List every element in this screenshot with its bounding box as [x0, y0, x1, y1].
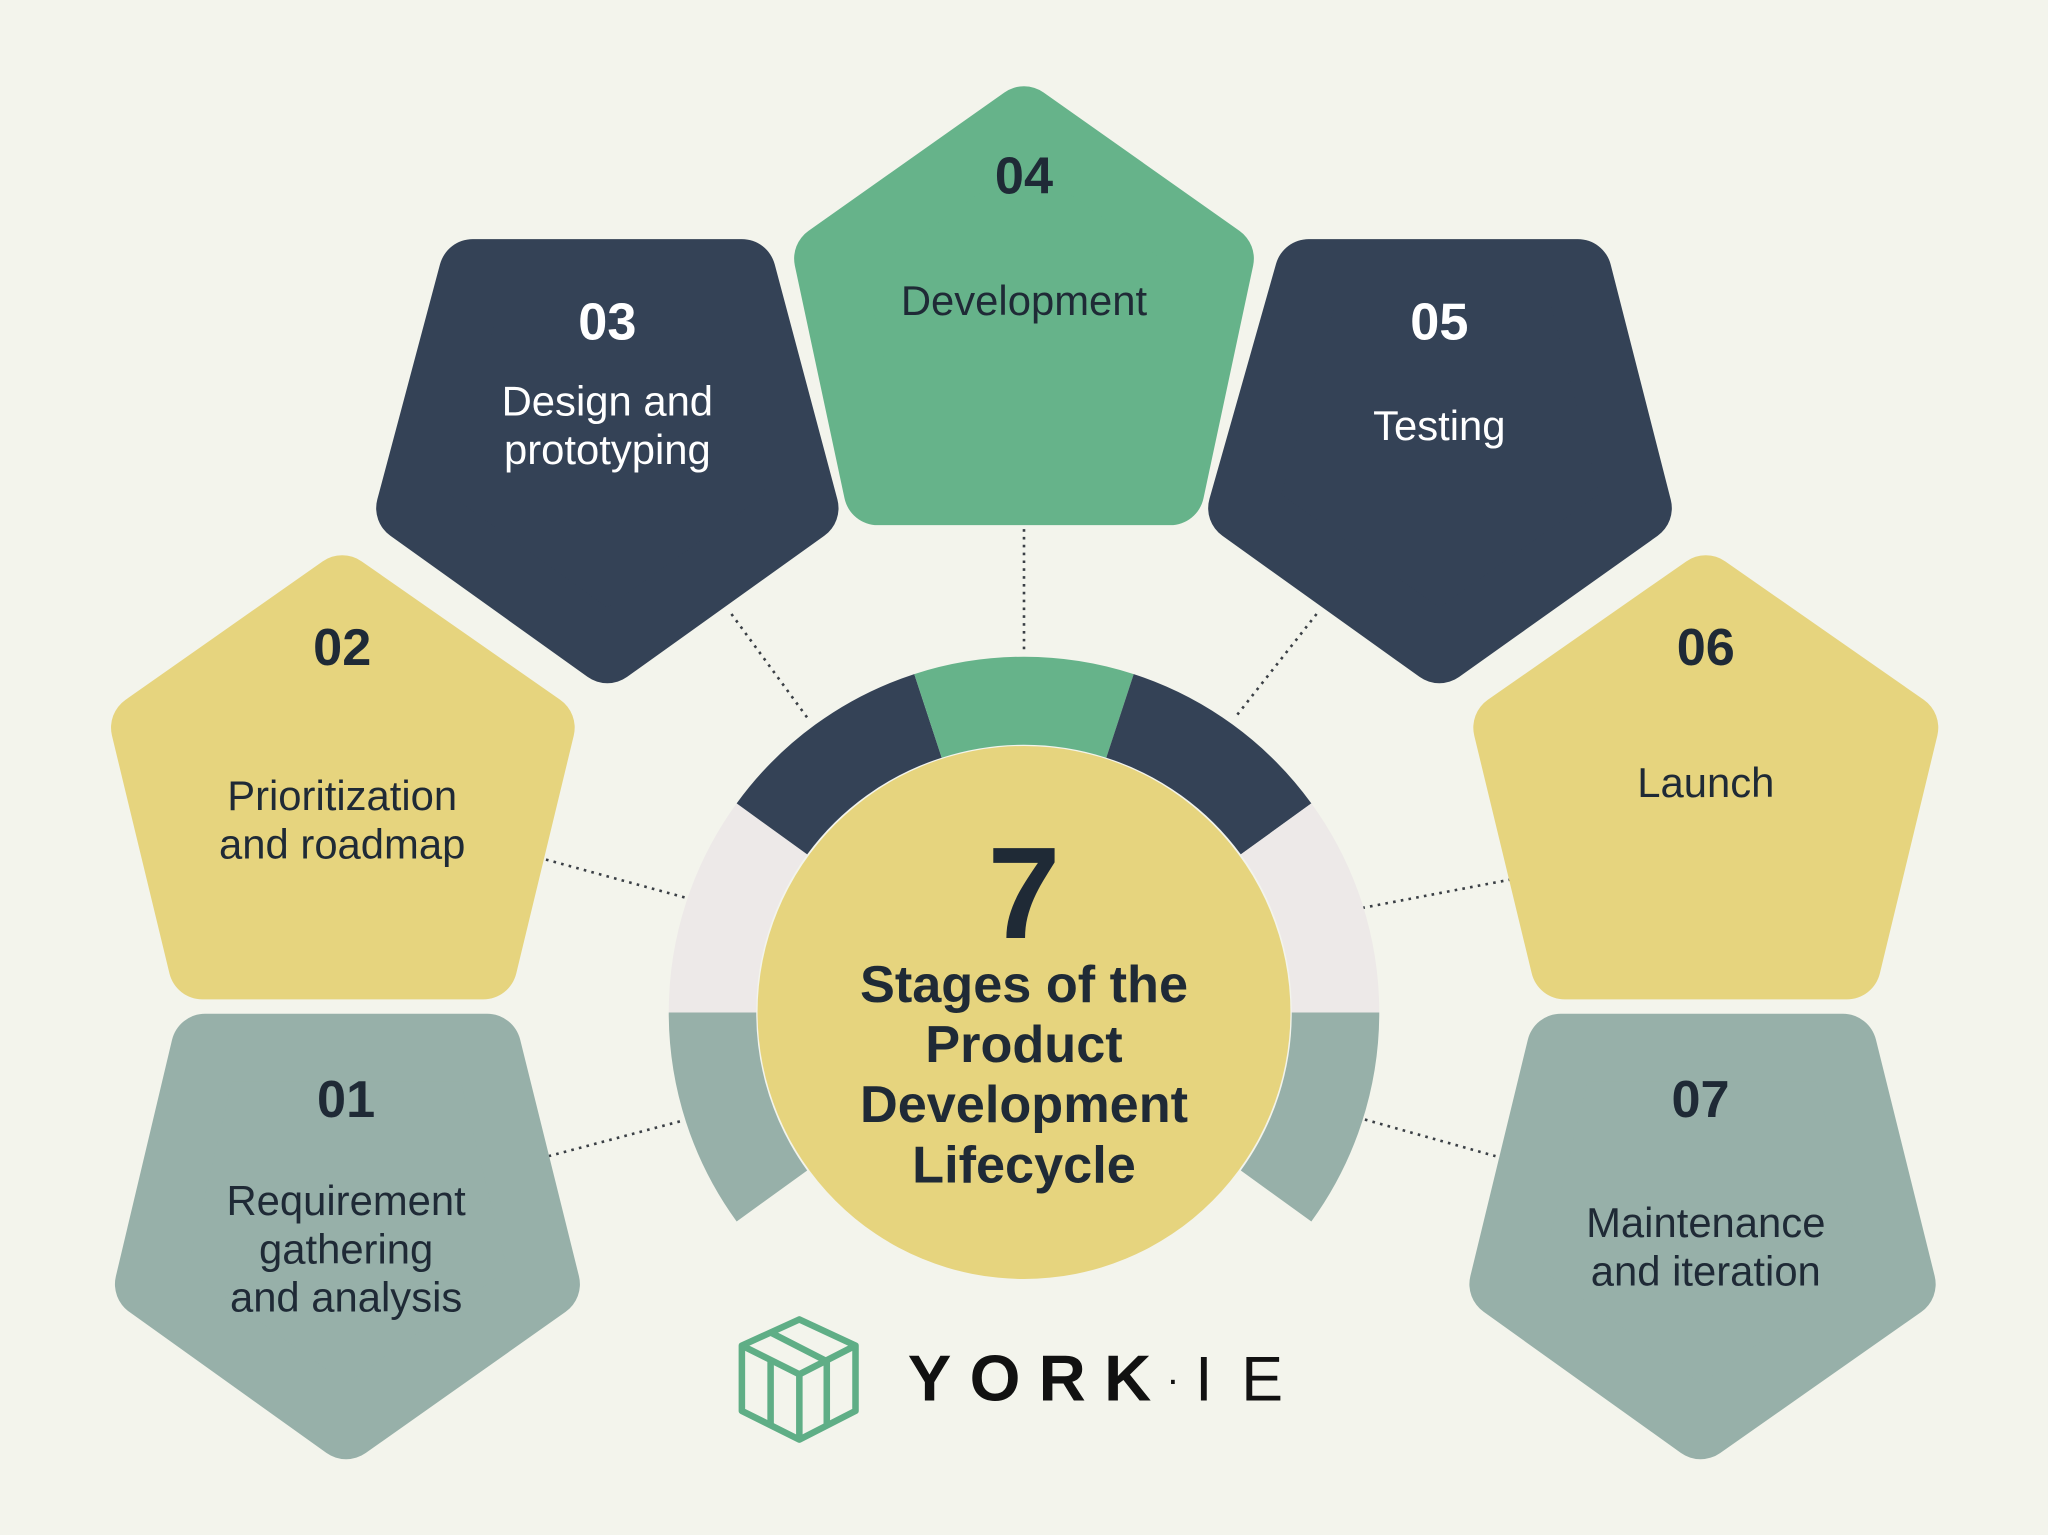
stage 06	[1507, 589, 1904, 965]
stage 03	[410, 273, 805, 649]
stage 01: gathering	[259, 1225, 433, 1272]
logo: IE	[1195, 1344, 1312, 1414]
logo: ·	[1166, 1359, 1179, 1402]
stage 03: prototyping	[504, 426, 711, 473]
stage 02: and roadmap	[219, 820, 465, 867]
center circle title	[758, 746, 1290, 1279]
stage 07	[1503, 1048, 1902, 1425]
stage 05: 05	[1410, 294, 1468, 352]
stage 02	[145, 589, 541, 965]
stage 06: 06	[1677, 619, 1735, 677]
logo: YORK	[908, 1341, 1170, 1414]
stage 07: Maintenance	[1586, 1199, 1825, 1246]
stage 06: Launch	[1637, 759, 1774, 806]
stage 01: 01	[317, 1071, 375, 1129]
stage 05	[1242, 273, 1638, 649]
stage 04: Development	[901, 277, 1148, 324]
stage 02: Prioritization	[227, 772, 457, 819]
center circle title: Stages of the	[860, 956, 1188, 1014]
stage 03: 03	[578, 294, 636, 352]
stage 07: and iteration	[1591, 1247, 1821, 1294]
ring chart	[669, 657, 1379, 1221]
stage 02: 02	[313, 619, 371, 677]
stage 05: Testing	[1373, 402, 1506, 449]
center circle title: Product	[925, 1016, 1123, 1074]
stage 04	[828, 120, 1220, 491]
center circle title: 7	[988, 820, 1060, 966]
stage 04: 04	[995, 147, 1053, 205]
icon: logo cubes	[742, 1319, 856, 1440]
stage 01: and analysis	[230, 1274, 462, 1321]
center circle title: Development	[860, 1076, 1188, 1134]
stage 03: Design and	[502, 377, 713, 424]
stage 01	[149, 1048, 546, 1425]
stage 01: Requirement	[226, 1177, 466, 1224]
center circle title: Lifecycle	[912, 1136, 1136, 1194]
stage 07: 07	[1672, 1071, 1730, 1129]
logo	[742, 1319, 1312, 1440]
